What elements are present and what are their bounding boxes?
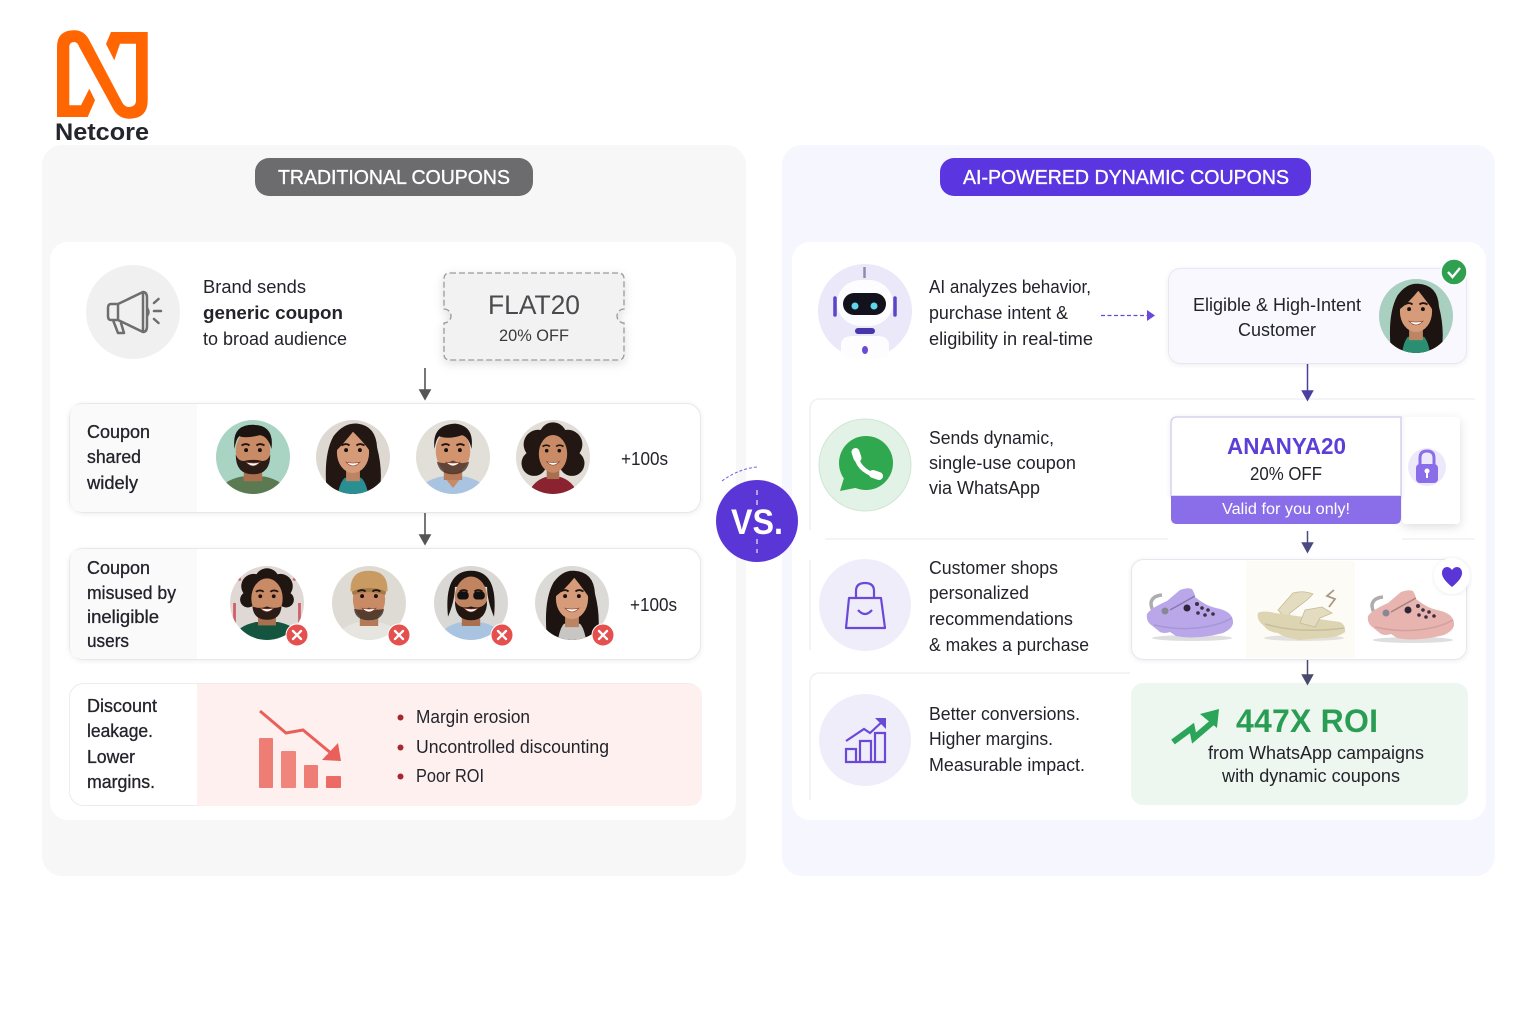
text: coupon misused by ineligible users: ineligible: [87, 607, 159, 627]
icon: rejected: [491, 624, 513, 646]
text: coupon misused by ineligible users: users: [87, 631, 129, 651]
icon: green check: [1441, 259, 1467, 285]
text: better conversions: Better conversions.: [929, 704, 1080, 724]
label: plus 100s: +100s: [621, 449, 668, 469]
card: eligible high-intent customer: Eligible & High-Intent: [1193, 295, 1361, 315]
icon: WhatsApp: [819, 419, 911, 511]
shoe: pink clog: [1368, 590, 1454, 643]
text: sends dynamic coupon: via WhatsApp: [929, 478, 1040, 498]
shoe: beige sandal: [1258, 590, 1345, 641]
arrow: to ROI: [1302, 660, 1312, 684]
text: customer shops: recommendations: [929, 609, 1073, 629]
icon: megaphone: [86, 265, 180, 359]
icon: rejected: [388, 624, 410, 646]
icon: heart badge: [1434, 558, 1470, 594]
heading: traditional coupons: TRADITIONAL COUPONS: [278, 167, 510, 189]
text: better conversions: Higher margins.: [929, 729, 1053, 749]
icon: rejected: [286, 624, 308, 646]
coupon: FLAT20: 20% OFF: [499, 326, 569, 345]
icon: green up arrow: [1173, 709, 1219, 742]
card: recommended shoes: [1132, 558, 1470, 660]
avatar: man green shirt: [216, 420, 290, 494]
text: customer shops: & makes a purchase: [929, 635, 1089, 655]
avatar: woman with rejection: [535, 566, 614, 646]
row: coupon misused: [70, 548, 700, 660]
arrow: to whatsapp coupon: [1302, 364, 1312, 400]
text: sends dynamic coupon: [929, 428, 1076, 498]
coupon: ANANYA20: ANANYA20: [1227, 433, 1346, 459]
text: coupon misused by ineligible users: [87, 558, 176, 651]
text: discount leakage lower margins: margins.: [87, 772, 155, 792]
text: customer shops: [929, 558, 1089, 655]
coupon: ANANYA20: [1171, 417, 1460, 524]
avatar: woman teal shirt: [316, 420, 390, 494]
badge: VS: [716, 467, 798, 562]
card: 447X ROI: 447X ROI: [1236, 703, 1378, 739]
avatar: Ananya: [1379, 279, 1453, 353]
text: sends dynamic coupon: Sends dynamic,: [929, 428, 1054, 448]
avatar: man blue shirt: [416, 420, 490, 494]
text: discount leakage lower margins: Discount: [87, 696, 157, 716]
text: AI analyzes behavior: AI analyzes behavior,: [929, 277, 1091, 297]
icon: rejected: [592, 624, 614, 646]
avatar: man with cap with rejection: [332, 566, 410, 646]
row: coupon shared widely: [70, 404, 700, 512]
coupon: ANANYA20: Valid for you only!: [1222, 501, 1350, 518]
label: plus 100s: +100s: [630, 595, 677, 615]
logo: Netcore: [55, 30, 149, 146]
badge: VS: VS.: [731, 503, 783, 542]
text: sends dynamic coupon: single-use coupon: [929, 453, 1076, 473]
list: consequences: [398, 707, 609, 786]
heading: traditional coupons: [255, 158, 533, 196]
text: brand sends generic coupon: Brand sends: [203, 277, 306, 297]
avatar: woman curly hair: [514, 418, 592, 496]
avatar: man with sunglasses with rejection: [434, 566, 512, 646]
text: better conversions: Measurable impact.: [929, 755, 1085, 775]
text: coupon misused by ineligible users: Coupon: [87, 558, 150, 578]
heading: AI-powered dynamic coupons: [940, 158, 1311, 196]
infographic canvas: [56, 30, 1495, 876]
arrow: to coupon shared: [420, 368, 430, 399]
card: eligible high-intent customer: Customer: [1238, 320, 1316, 340]
card: eligible high-intent customer: [1168, 259, 1467, 364]
text: AI analyzes behavior: eligibility in real-time: [929, 329, 1093, 349]
text: coupon shared widely: widely: [86, 473, 138, 493]
arrow: to shoes: [1302, 531, 1312, 552]
text: coupon shared widely: Coupon: [87, 422, 150, 442]
coupon: ANANYA20: 20% OFF: [1250, 464, 1322, 484]
icon: shopping bag: [819, 559, 911, 651]
card: 447X ROI: from WhatsApp campaigns: [1208, 743, 1424, 763]
text: customer shops: Customer shops: [929, 558, 1058, 578]
card: 447X ROI: [1131, 683, 1468, 805]
text: coupon shared widely: shared: [87, 447, 141, 467]
shoe: lilac clog: [1147, 588, 1233, 641]
text: customer shops: personalized: [929, 583, 1029, 603]
row: discount leakage: [70, 684, 702, 806]
text: AI analyzes behavior: purchase intent &: [929, 303, 1068, 323]
icon: robot: [818, 264, 912, 359]
card: 447X ROI: with dynamic coupons: [1221, 766, 1400, 786]
text: better conversions: [929, 704, 1085, 775]
avatar: curly man with rejection: [230, 566, 308, 646]
panel: AI-powered dynamic coupons: [782, 145, 1495, 876]
arrow: to coupon misused: [420, 513, 430, 544]
text: brand sends generic coupon: generic coupon: [203, 303, 343, 323]
text: brand sends generic coupon: to broad audience: [203, 329, 347, 349]
arrow: dashed to customer: [1101, 310, 1155, 321]
list: consequences: Uncontrolled discounting: [416, 737, 609, 757]
text: brand sends generic coupon: [203, 277, 347, 349]
panel: traditional coupons: [69, 158, 702, 806]
list: consequences: Margin erosion: [416, 707, 530, 727]
text: coupon shared widely: [86, 422, 150, 493]
list: consequences: Poor ROI: [416, 766, 484, 786]
text: discount leakage lower margins: Lower: [87, 747, 135, 767]
text: discount leakage lower margins: [87, 696, 157, 792]
text: discount leakage lower margins: leakage.: [87, 721, 153, 741]
icon: growth chart: [819, 694, 911, 786]
icon: lock: [1408, 448, 1446, 486]
chart: falling bars and arrow: [259, 711, 341, 788]
heading: AI-powered dynamic coupons: AI-POWERED DYNAMIC COUPONS: [963, 167, 1289, 189]
text: AI analyzes behavior: [929, 277, 1093, 349]
text: coupon misused by ineligible users: misused by: [87, 583, 176, 603]
coupon: FLAT20: [444, 273, 624, 360]
coupon: FLAT20: FLAT20: [488, 290, 580, 320]
logo: Netcore: Netcore: [55, 119, 149, 146]
